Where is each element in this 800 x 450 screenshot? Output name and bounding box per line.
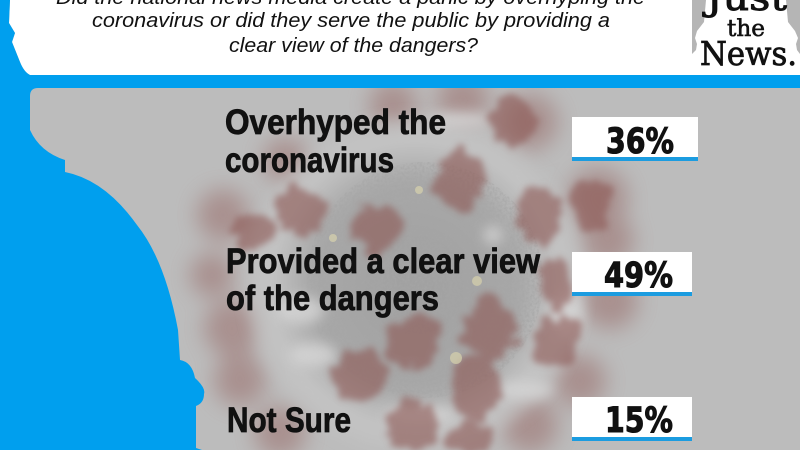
- question text: clear view of the dangers?: [229, 35, 479, 57]
- question text: [56, 0, 645, 57]
- value 36%: [572, 117, 698, 162]
- virus light patches: [276, 112, 583, 424]
- option 2: clear view: [226, 242, 541, 318]
- option 1: overhyped: Overhyped the: [225, 103, 446, 142]
- logo building silhouette: [692, 0, 800, 54]
- option 1: overhyped: [225, 103, 446, 180]
- logo: Just the News: the: [727, 16, 765, 42]
- option 1: overhyped: coronavirus: [225, 141, 394, 180]
- header panel: [0, 0, 800, 75]
- virus image: [190, 74, 638, 450]
- value 49%: [572, 252, 692, 296]
- value 49%: 49%: [604, 256, 673, 296]
- value 15%: 15%: [605, 401, 673, 441]
- virus outer spikes: [190, 74, 638, 450]
- option 2: clear view: Provided a clear view: [226, 242, 541, 281]
- virus core: [245, 115, 585, 450]
- value 15%: [572, 397, 692, 441]
- question text: coronavirus or did they serve the public by providing a: [92, 10, 610, 32]
- option 3: not sure: Not Sure: [227, 401, 351, 440]
- virus red spike proteins: [231, 94, 610, 450]
- virus yellow dots: [329, 186, 482, 364]
- option 2: clear view: of the dangers: [226, 279, 439, 318]
- logo: Just the News: [692, 0, 800, 73]
- value 36%: 36%: [606, 122, 674, 162]
